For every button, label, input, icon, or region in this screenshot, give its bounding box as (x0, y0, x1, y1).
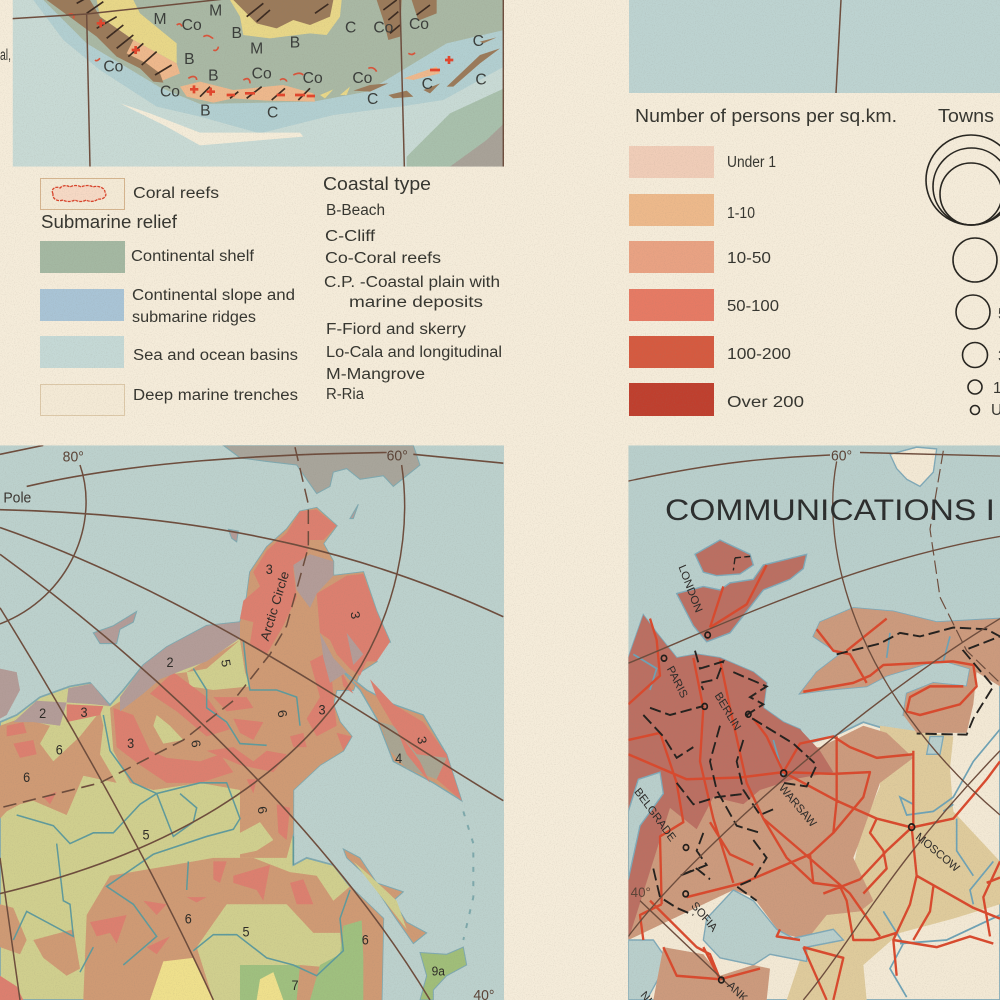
legend: population density: Over 200 (727, 394, 804, 411)
map title: COMMUNICATIONS I (665, 494, 995, 527)
legend: submarine relief: submarine ridges (132, 309, 256, 326)
coastal type letters: C (345, 19, 356, 36)
city labels (632, 563, 961, 1000)
degree labels (63, 448, 494, 1000)
coastal type letters: B (290, 34, 300, 51)
city labels: WARSAW (776, 782, 818, 830)
coastal type letters: Co (160, 84, 180, 101)
coastal type letters: M (209, 2, 222, 19)
coastal type letters: B (231, 25, 242, 42)
region numbers: 7 (291, 978, 299, 993)
city markers (661, 632, 915, 983)
city labels: BELGRADE (632, 786, 678, 845)
region numbers: 3 (414, 735, 430, 745)
region numbers: 5 (218, 658, 234, 668)
Arctic Circle label: Arctic Circle (257, 569, 292, 643)
region numbers: 3 (348, 610, 363, 620)
city labels: PARIS (664, 664, 690, 701)
Alaska (223, 445, 420, 494)
region numbers (23, 562, 445, 993)
Arctic circle dashed (0, 447, 308, 808)
legend: population density: 10-50 (727, 250, 771, 267)
region numbers: 2 (166, 654, 174, 670)
reefs (68, 14, 415, 83)
legend: submarine relief: Continental slope and (132, 287, 295, 304)
land: Borneo (230, 0, 342, 38)
cut-off caption fragment: al, (0, 47, 11, 64)
coastal type letters: M (250, 40, 263, 57)
coastal type letters: Co (252, 66, 272, 83)
coastal type letters: Co (352, 70, 373, 87)
coastal type letters: C (475, 71, 487, 88)
legend: coastal type: marine deposits (349, 294, 483, 311)
tan band (787, 726, 1000, 1000)
legend: population density: Under 1 (727, 154, 776, 171)
region numbers: 3 (127, 735, 134, 751)
roads (628, 619, 1000, 1000)
city labels: SOFIA (689, 900, 719, 935)
coastal type letters: C (473, 33, 484, 50)
region numbers: 9a (432, 964, 445, 979)
city labels: MOSCOW (913, 831, 961, 875)
islands (343, 849, 427, 944)
map: communications in Europe and Asia (628, 445, 1000, 1000)
region numbers: 3 (266, 562, 273, 577)
region numbers: 6 (185, 911, 192, 927)
coastal type letters: Co (182, 17, 202, 34)
region numbers: 3 (80, 705, 88, 720)
legend: population density: 1-10 (727, 205, 755, 222)
degree labels (631, 448, 852, 900)
seas (628, 736, 943, 1000)
legend: population density: 50-100 (727, 298, 779, 315)
land: Celebes and eastern islands (320, 0, 500, 98)
legend: coastal type: R-Ria (326, 386, 364, 403)
green plains (240, 920, 363, 1000)
region numbers: 6 (188, 739, 204, 749)
region numbers: 5 (242, 924, 250, 940)
coastal type letters: Co (103, 58, 124, 75)
legend: population density: Number of persons per sq.km. (635, 106, 897, 126)
region numbers: 6 (255, 805, 270, 815)
Pole label: Pole (3, 490, 31, 507)
region numbers: 3 (318, 702, 326, 717)
coastal type letters: B (208, 68, 219, 85)
degree labels: 40° (631, 884, 651, 900)
coastal type letters: B (200, 103, 211, 120)
coastal type letters: M (153, 11, 167, 28)
legend: submarine relief: Sea and ocean basins (133, 347, 298, 364)
legend: coral reefs: Coral reefs (133, 185, 219, 202)
graticule lines (0, 445, 503, 1000)
lowland pockets (153, 640, 343, 1000)
coastal type letters: C (267, 105, 278, 122)
map: physical regions of northern Asia (0, 445, 504, 1000)
legend: submarine relief: Submarine relief (41, 212, 178, 232)
degree labels: 60° (387, 448, 408, 465)
dense brown-red zone (628, 615, 833, 940)
legend: population density (629, 106, 897, 416)
legend: coastal type (323, 174, 502, 403)
city labels: BERLIN (712, 690, 743, 733)
region numbers: 6 (23, 770, 30, 785)
brown uplands (0, 508, 462, 1000)
legend: submarine relief (40, 212, 298, 416)
region numbers: 6 (362, 932, 369, 947)
legend: coastal type: B-Beach (326, 202, 385, 219)
degree labels: 60° (831, 448, 852, 465)
borders (643, 627, 1000, 915)
coastal type letters: Co (373, 19, 394, 36)
coastal type letters (103, 2, 487, 122)
land base (0, 508, 390, 1000)
graticule (12, 0, 503, 167)
legend: towns (926, 106, 1000, 419)
coastal type letters: Co (303, 70, 323, 87)
legend: submarine relief: Deep marine trenches (133, 387, 298, 404)
city labels: LONDON (676, 563, 704, 615)
medium brown zone (628, 726, 913, 940)
rivers (633, 633, 1000, 997)
region numbers: 2 (39, 705, 46, 721)
legend: coastal type: C.P. -Coastal plain with (324, 274, 500, 291)
legend: coastal type: C-Cliff (325, 228, 376, 245)
legend: coastal type: M-Mangrove (326, 366, 425, 383)
mountains: salmon (0, 510, 462, 1000)
gray tundra (0, 554, 363, 726)
map: population density top fragment (629, 0, 1000, 93)
region numbers: 6 (56, 742, 63, 757)
Britain (677, 540, 807, 642)
region numbers: 5 (142, 827, 150, 842)
map: coastal types of south-east Asia (12, 0, 504, 167)
region numbers: 6 (275, 709, 290, 719)
legend: coral reefs (40, 178, 219, 210)
legend: towns: Towns (938, 106, 994, 126)
rivers (13, 640, 350, 976)
legend: coastal type: Lo-Cala and longitudinal (326, 344, 502, 361)
coastal type letters: B (184, 51, 195, 68)
coastal type letters: C (422, 76, 433, 93)
coastal type letters: Co (409, 16, 429, 33)
legend: coastal type: Co-Coral reefs (325, 250, 441, 267)
region numbers: 4 (395, 751, 402, 766)
coastal type letters: C (367, 91, 378, 108)
land: Sumatra (47, 0, 180, 83)
legend: submarine relief: Continental shelf (131, 248, 255, 265)
land base (628, 608, 1000, 1000)
graticule (628, 452, 1000, 1000)
degree labels: 80° (63, 449, 84, 466)
legend: coastal type: Coastal type (323, 174, 431, 194)
legend: population density: 100-200 (727, 346, 791, 363)
legend: coastal type: F-Fiord and skerry (326, 321, 466, 338)
land: Java (180, 82, 315, 103)
